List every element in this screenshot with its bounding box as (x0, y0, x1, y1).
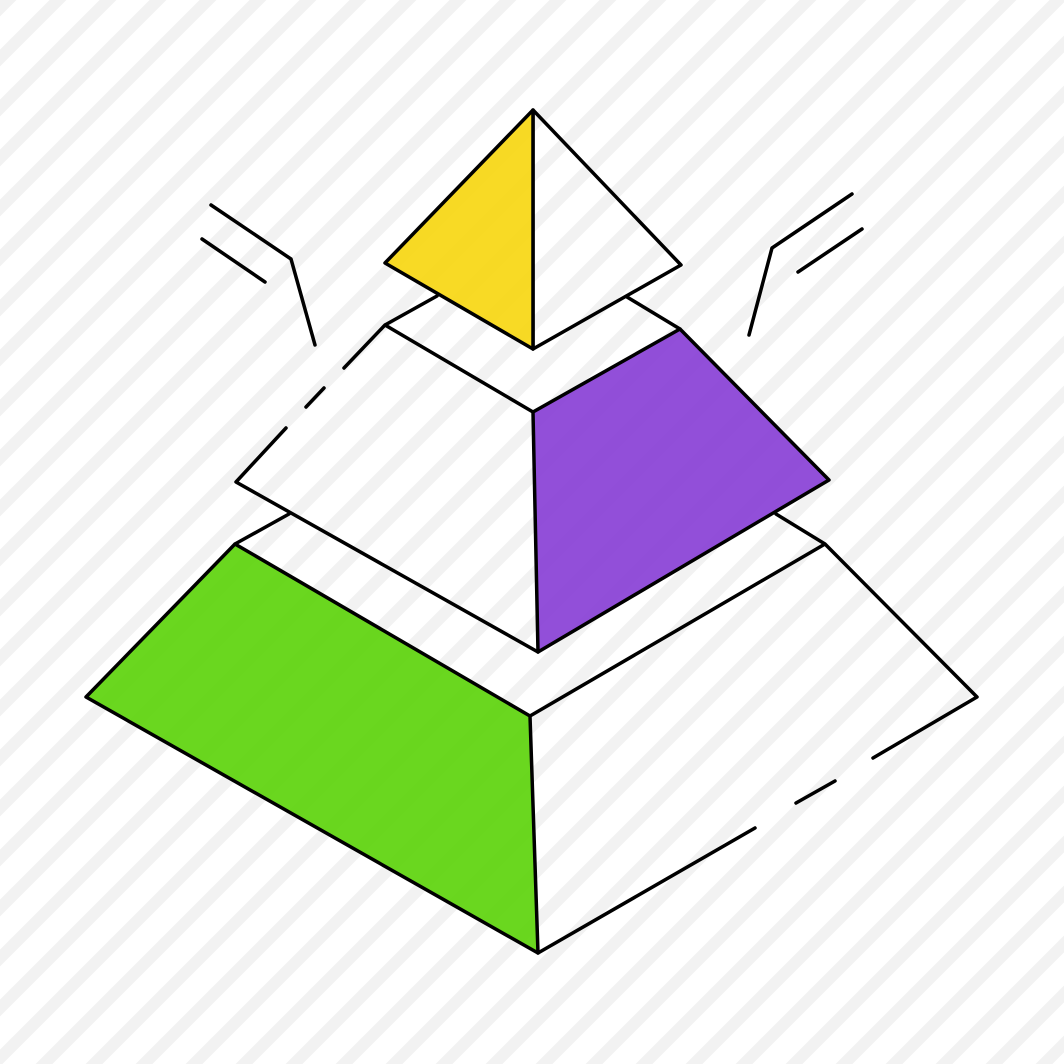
top tier (385, 110, 681, 349)
middle tier (236, 296, 829, 652)
decoration: left lines (202, 205, 315, 345)
bottom tier (86, 514, 977, 953)
decoration: right lines (749, 194, 862, 335)
